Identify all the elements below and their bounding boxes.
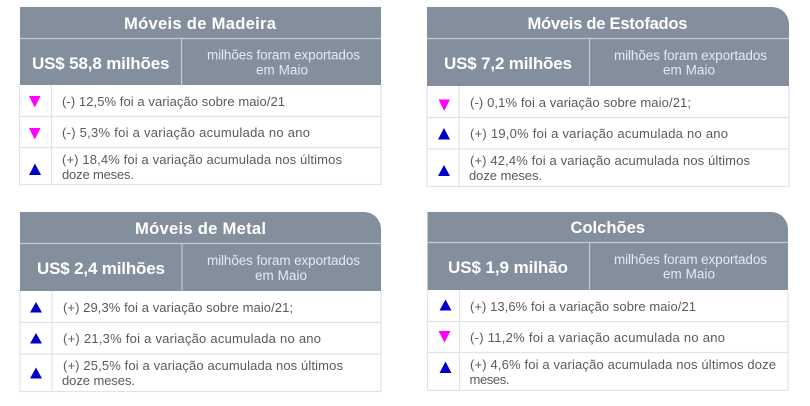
heading: Colchões — [570, 218, 645, 237]
row text: doze meses. — [62, 167, 134, 182]
panel header background — [20, 212, 381, 291]
panel header background — [20, 7, 381, 85]
icon: up triangle — [440, 362, 452, 373]
export description — [207, 253, 360, 283]
row text: (-) 12,5% foi a variação sobre maio/21 — [62, 94, 285, 109]
row text: meses. — [470, 372, 510, 387]
row text — [62, 152, 342, 182]
export description: em Maio — [663, 62, 715, 78]
row text: (-) 5,3% foi a variação acumulada no ano — [62, 125, 310, 140]
table rows grid — [428, 290, 788, 390]
row text — [62, 358, 344, 388]
icon: down triangle — [29, 128, 40, 140]
row text: (+) 13,6% foi a variação sobre maio/21 — [470, 299, 696, 314]
icon: down triangle — [29, 96, 40, 108]
heading: Móveis de Metal — [135, 219, 266, 238]
heading: Móveis de Estofados — [528, 14, 688, 33]
icon: down triangle — [438, 331, 450, 342]
export description — [207, 48, 360, 78]
row text: (+) 18,4% foi a variação acumulada nos últimos — [62, 152, 342, 167]
panel grid lines — [427, 38, 789, 86]
row text: doze meses. — [62, 373, 135, 388]
table rows grid — [20, 85, 381, 184]
export description: milhões foram exportados — [207, 253, 360, 268]
panel: Móveis de Estofados — [427, 7, 789, 186]
row text: (+) 42,4% foi a variação acumulada nos últimos — [470, 153, 750, 168]
export value: US$ 2,4 milhões — [37, 259, 165, 278]
icon: up triangle — [30, 302, 42, 312]
row text: (+) 25,5% foi a variação acumulada nos últimos — [63, 358, 344, 373]
icon: up triangle — [30, 333, 42, 344]
export description: em Maio — [663, 266, 715, 282]
icon: up triangle — [29, 164, 41, 175]
export description: em Maio — [255, 268, 307, 283]
icon: up triangle — [438, 128, 450, 140]
panel header background — [427, 7, 789, 86]
panel grid lines — [428, 242, 788, 290]
export description: milhões foram exportados — [207, 48, 360, 62]
row text: (-) 11,2% foi a variação acumulada no ano — [470, 330, 725, 345]
row text: (-) 0,1% foi a variação sobre maio/21; — [470, 95, 691, 110]
panel header background — [428, 212, 788, 290]
icon: down triangle — [438, 100, 450, 111]
row text — [470, 357, 776, 387]
panel grid lines — [20, 38, 381, 85]
icon: up triangle — [30, 368, 42, 378]
row text: (+) 4,6% foi a variação acumulada nos últimos doze — [470, 357, 776, 372]
heading: Móveis de Madeira — [124, 14, 277, 33]
export description: milhões foram exportados — [614, 252, 767, 267]
row text: (+) 19,0% foi a variação acumulada no ano — [470, 126, 728, 141]
export description — [614, 252, 767, 282]
icon: up triangle — [440, 300, 452, 310]
export value: US$ 7,2 milhões — [444, 54, 572, 73]
export description — [614, 48, 767, 78]
export description: em Maio — [256, 62, 308, 78]
panel grid lines — [20, 244, 381, 291]
row text: (+) 21,3% foi a variação acumulada no ano — [63, 331, 321, 346]
row text: (+) 29,3% foi a variação sobre maio/21; — [63, 300, 293, 315]
panel: Colchões — [428, 212, 788, 390]
icon: up triangle — [438, 165, 450, 176]
row text: doze meses. — [469, 168, 542, 183]
export value: US$ 58,8 milhões — [32, 54, 170, 73]
table rows grid — [427, 86, 789, 186]
panel: Móveis de Metal — [20, 212, 381, 392]
export value: US$ 1,9 milhão — [448, 258, 568, 277]
export description: milhões foram exportados — [614, 48, 767, 63]
row text — [469, 153, 750, 183]
table rows grid — [20, 291, 381, 392]
panel: Móveis de Madeira — [20, 7, 381, 184]
